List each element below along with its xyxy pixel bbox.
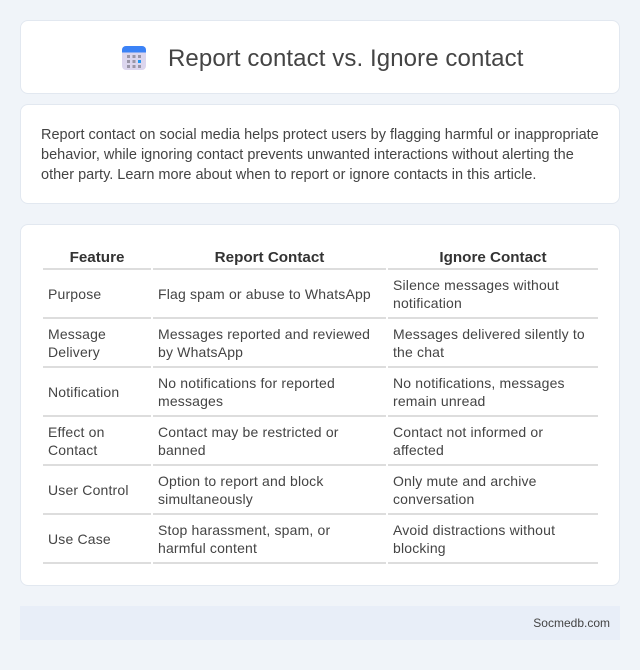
intro text: Report contact on social media helps protect users by flagging harmful or inappropriate	[41, 127, 599, 143]
cell	[393, 424, 543, 458]
row: Purpose: Purpose	[48, 286, 101, 302]
cell	[393, 277, 559, 311]
cell	[393, 522, 555, 556]
row: Effect on Contact: Contact	[48, 442, 97, 458]
intro text: behavior, while ignoring contact prevents unwanted interactions without alerting the	[41, 147, 574, 163]
cell	[158, 424, 339, 458]
cell: messages	[158, 393, 223, 409]
footer bar	[20, 606, 620, 640]
cell	[158, 375, 335, 409]
panel: comparison table	[20, 224, 620, 586]
cell: banned	[158, 442, 206, 458]
cell: Messages reported and reviewed	[158, 326, 370, 342]
row: Use Case: Use Case	[48, 531, 111, 547]
row: Message Delivery: Delivery	[48, 344, 100, 360]
title: Report contact vs. Ignore contact	[168, 45, 523, 72]
cell: Silence messages without	[393, 277, 559, 293]
footer credit: Socmedb.com	[533, 616, 610, 630]
cell	[393, 375, 565, 409]
cell: Flag spam or abuse to WhatsApp	[158, 286, 371, 302]
cell: affected	[393, 442, 444, 458]
cell: simultaneously	[158, 491, 253, 507]
cell: by WhatsApp	[158, 344, 243, 360]
row: Effect on Contact	[48, 424, 105, 458]
column heading: Report Contact: Report Contact	[215, 249, 324, 266]
cell: Messages delivered silently to	[393, 326, 585, 342]
column heading: Feature: Feature	[70, 249, 124, 266]
cell: Contact not informed or	[393, 424, 543, 440]
cell	[158, 326, 370, 360]
cell: Contact may be restricted or	[158, 424, 339, 440]
panel: header	[20, 20, 620, 94]
cell: No notifications, messages	[393, 375, 565, 391]
panel: introduction	[20, 104, 620, 204]
cell: blocking	[393, 540, 446, 556]
cell: Stop harassment, spam, or	[158, 522, 330, 538]
row: Effect on Contact: Effect on	[48, 424, 105, 440]
cell: conversation	[393, 491, 474, 507]
cell	[393, 473, 537, 507]
icon: calendar	[122, 46, 146, 70]
cell: harmful content	[158, 540, 257, 556]
intro text: other party. Learn more about when to report or ignore contacts in this article.	[41, 167, 536, 183]
cell: remain unread	[393, 393, 486, 409]
cell: Option to report and block	[158, 473, 324, 489]
row: Notification: Notification	[48, 384, 119, 400]
cell: Avoid distractions without	[393, 522, 555, 538]
cell	[158, 473, 324, 507]
cell	[158, 522, 330, 556]
cell	[393, 326, 585, 360]
intro text	[41, 127, 599, 183]
cell: Only mute and archive	[393, 473, 537, 489]
row: User Control: User Control	[48, 482, 129, 498]
cell: No notifications for reported	[158, 375, 335, 391]
row: Message Delivery	[48, 326, 106, 360]
cell: the chat	[393, 344, 444, 360]
column heading: Ignore Contact: Ignore Contact	[439, 249, 547, 266]
cell: notification	[393, 295, 462, 311]
row: Message Delivery: Message	[48, 326, 106, 342]
